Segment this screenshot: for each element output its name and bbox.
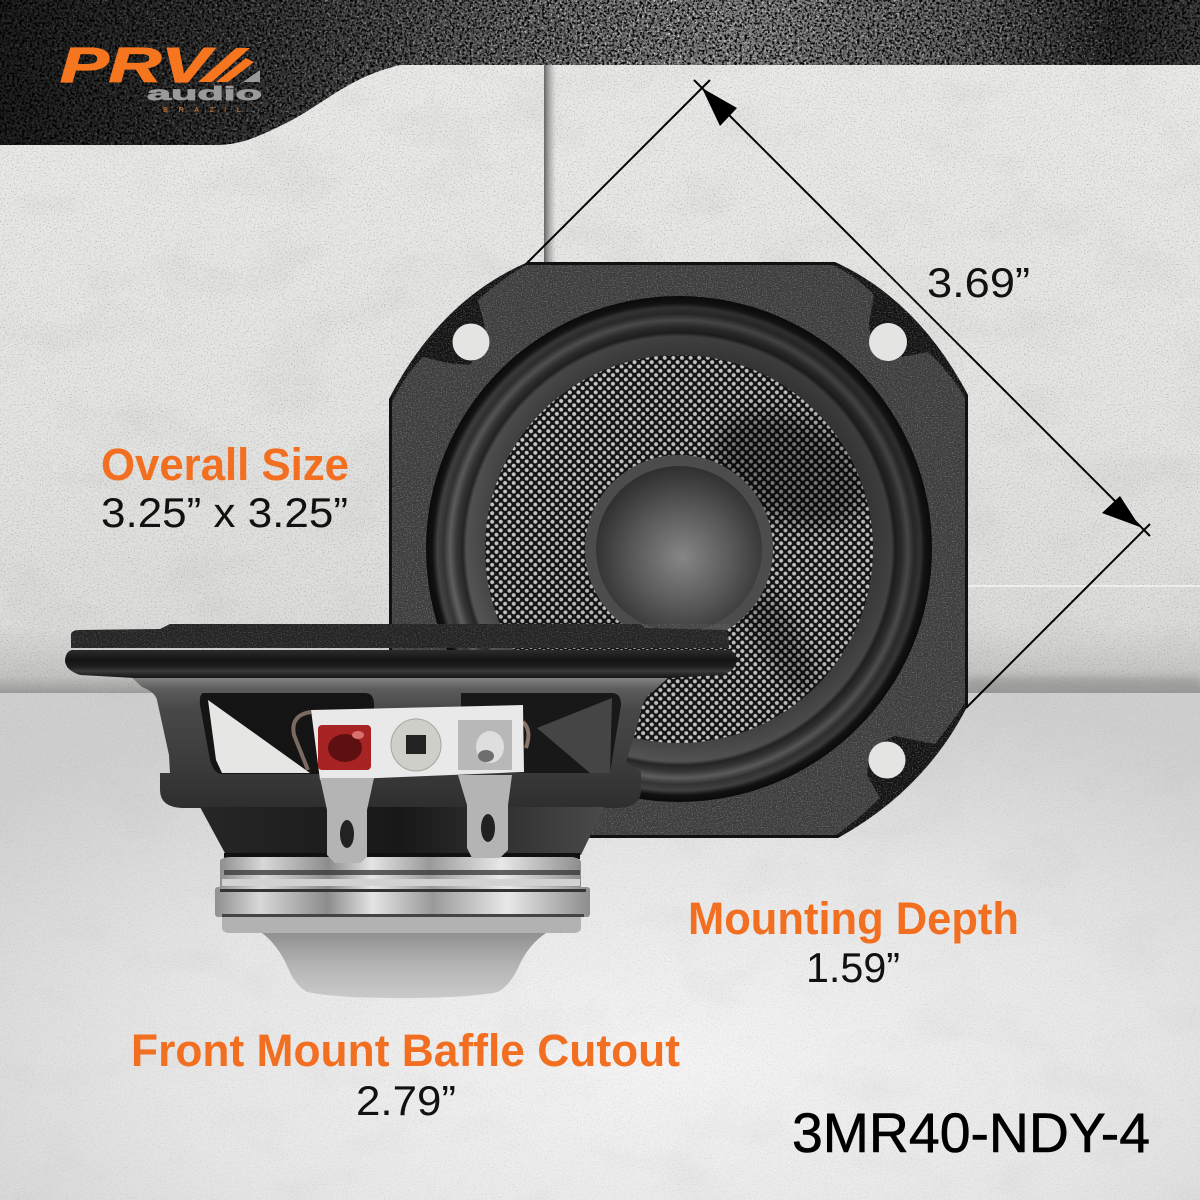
arrowhead: bottom	[1102, 496, 1140, 527]
dimension lines	[525, 80, 1150, 708]
logo word audio: audio	[147, 84, 262, 105]
top plate	[220, 853, 581, 887]
callout: overall size	[101, 439, 349, 536]
line: upper-left extension	[525, 80, 710, 265]
brand logo	[60, 39, 262, 114]
side-view speaker	[65, 624, 736, 998]
line: 3.69 inch diagonal	[694, 80, 1150, 536]
terminal board	[311, 705, 524, 780]
callout: diagonal dimension: 3.69”	[927, 259, 1030, 306]
heading: baffle cutout: Front Mount Baffle Cutout	[131, 1025, 680, 1076]
arrowhead: top	[702, 88, 737, 126]
bottom lip	[222, 917, 581, 933]
dark header band	[0, 0, 1200, 146]
right basket window	[461, 693, 621, 773]
callout: mounting depth	[688, 893, 1019, 991]
red positive terminal	[318, 725, 371, 770]
right spade terminal	[458, 775, 512, 858]
lead wires	[293, 712, 528, 770]
centre rivet	[391, 719, 441, 771]
line: lower-right extension	[966, 524, 1150, 708]
model number: 3MR40-NDY-4	[792, 1101, 1150, 1164]
mounting holes	[452, 323, 907, 778]
left spade terminal	[320, 778, 374, 863]
value: mounting depth: 1.59”	[806, 944, 900, 991]
foam gasket	[392, 265, 965, 835]
callout: baffle cutout	[131, 1025, 680, 1124]
magnet cup	[200, 807, 604, 855]
woven cone	[485, 355, 884, 743]
logo chevron stripes	[198, 48, 260, 82]
left basket window	[200, 693, 374, 774]
mounting flange	[65, 650, 736, 678]
foam gasket top	[71, 624, 729, 648]
value: baffle cutout: 2.79”	[356, 1077, 456, 1124]
rear pot	[262, 933, 546, 998]
dust cap	[585, 455, 773, 643]
heading: overall size: Overall Size	[101, 439, 349, 490]
speaker frame	[389, 262, 968, 838]
value: overall size: 3.25” x 3.25”	[101, 489, 348, 536]
negative solder pad	[458, 720, 512, 770]
basket bell	[130, 676, 670, 808]
heading: mounting depth: Mounting Depth	[688, 893, 1019, 944]
magnet ring	[215, 887, 590, 917]
front-view speaker	[389, 262, 968, 838]
surround	[426, 296, 932, 802]
logo wordmark PRV: PRV	[60, 39, 216, 93]
logo word Brazil: BRAZIL	[163, 107, 242, 114]
